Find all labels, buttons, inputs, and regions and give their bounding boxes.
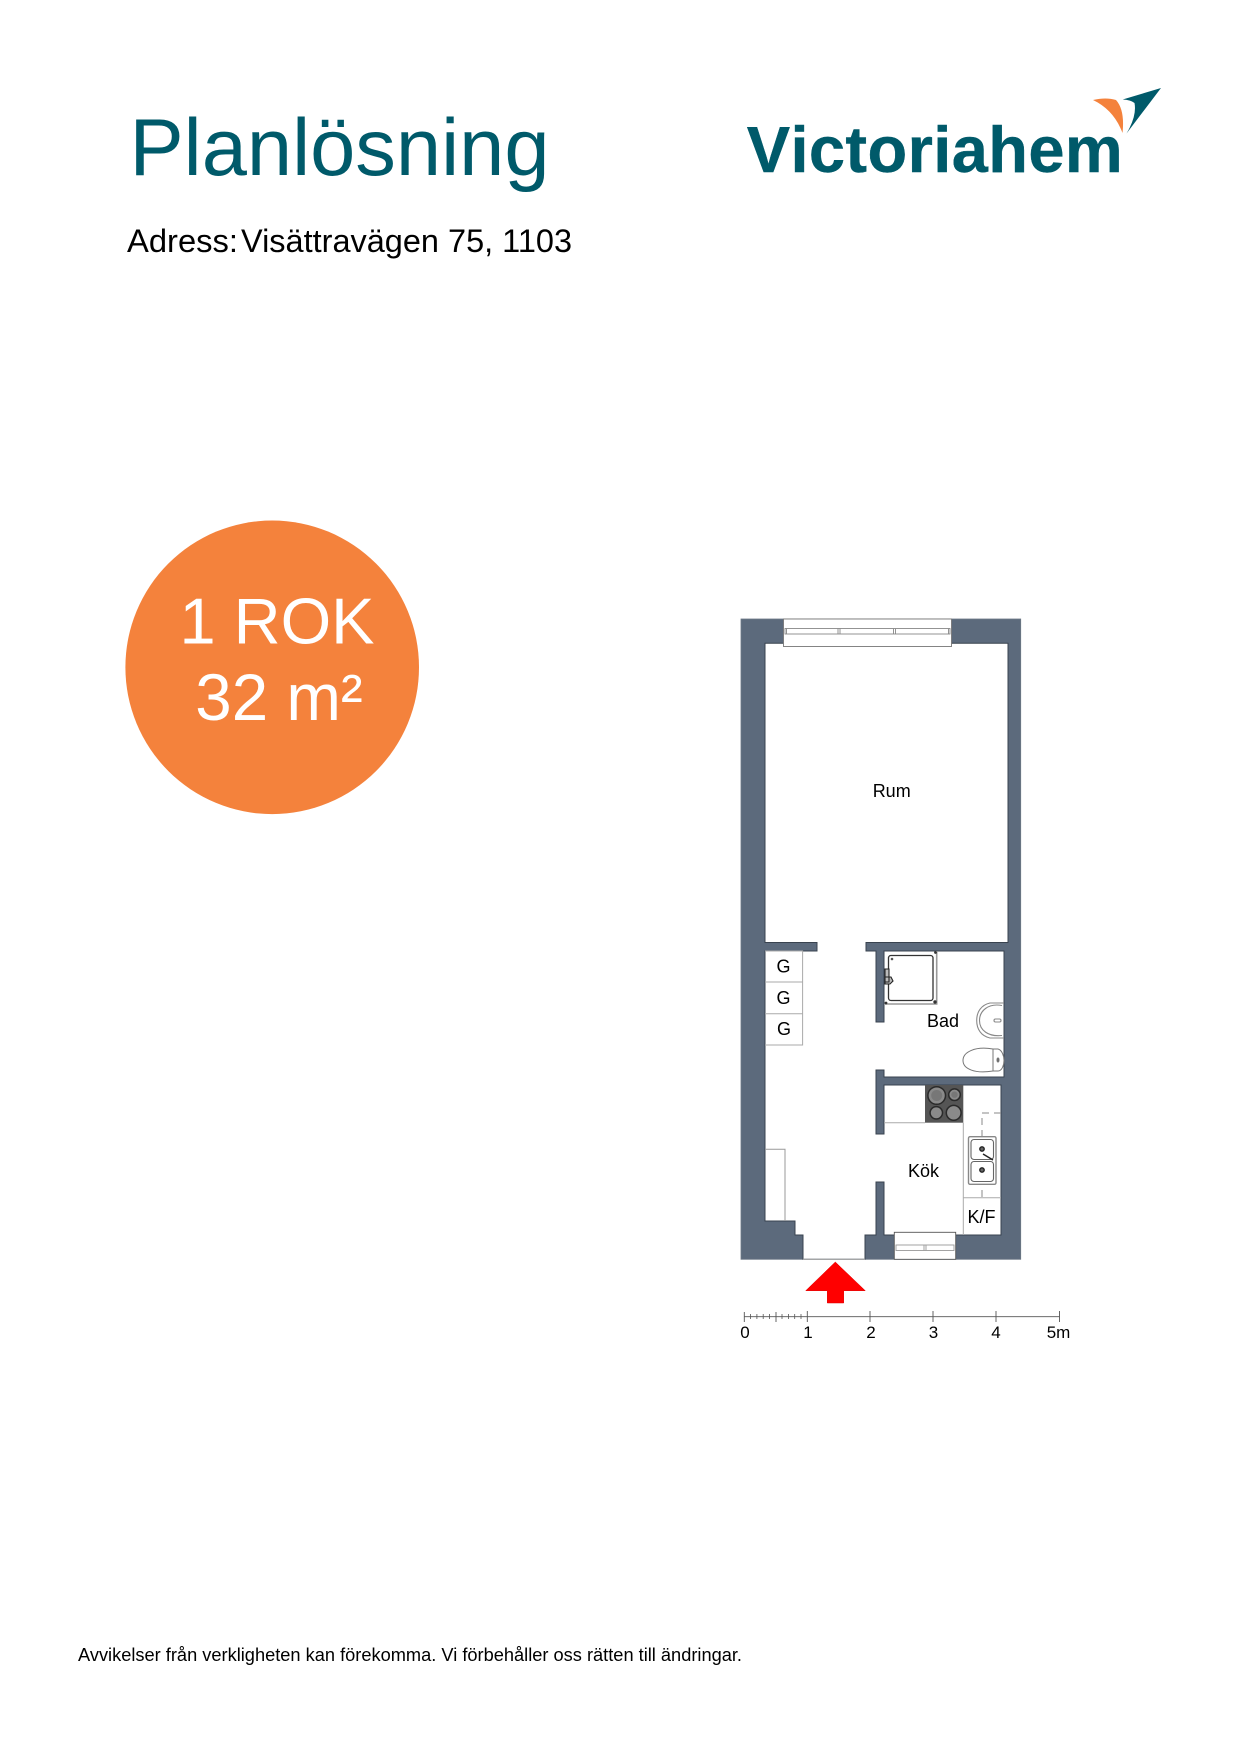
interior floor area xyxy=(765,643,1008,1259)
badge: 1 ROK 32 m²: 32 m² xyxy=(195,661,363,734)
kitchen sink xyxy=(968,1137,996,1184)
title: Planlösning xyxy=(130,103,550,193)
footer disclaimer: Avvikelser från verkligheten kan förekomma. Vi förbehåller oss rätten till ändringar. xyxy=(78,1645,742,1665)
scale bar: 5m xyxy=(1047,1323,1070,1342)
scale bar: 3 xyxy=(929,1323,938,1342)
window: room xyxy=(784,619,952,646)
scale bar: 2 xyxy=(866,1323,876,1342)
badge: 1 ROK 32 m² xyxy=(125,520,419,814)
scale bar xyxy=(740,1311,1070,1342)
room label: Kök: Kök xyxy=(908,1161,940,1181)
logo wordmark: Victoriahem xyxy=(747,113,1123,186)
shower xyxy=(885,951,937,1004)
entrance threshold xyxy=(803,1258,865,1260)
closet lower left xyxy=(765,1149,785,1221)
scale bar: 0 xyxy=(740,1323,750,1342)
window: kitchen xyxy=(894,1232,956,1259)
address: Adress: xyxy=(127,223,238,259)
scale bar: 4 xyxy=(991,1323,1001,1342)
scale bar: 1 xyxy=(803,1323,813,1342)
logo: Victoriahem xyxy=(747,88,1161,186)
floor plan xyxy=(741,619,1021,1259)
wardrobes G xyxy=(765,951,803,1045)
arrow: entrance xyxy=(806,1262,865,1303)
kitchen wall cabinet dashes xyxy=(982,1113,1001,1197)
kitchen counter xyxy=(884,1123,1001,1235)
room label: Bad: Bad xyxy=(927,1011,959,1031)
fridge label: K/F: K/F xyxy=(967,1207,996,1227)
stove xyxy=(925,1085,963,1123)
room label: Rum: Rum xyxy=(873,781,911,801)
wardrobes G: G xyxy=(776,988,791,1008)
wardrobes G: G xyxy=(776,956,791,976)
address: Visättravägen 75, 1103 xyxy=(241,223,572,259)
wardrobes G: G xyxy=(777,1019,791,1039)
toilet xyxy=(963,1048,1004,1072)
exterior walls xyxy=(741,619,1021,1259)
bathroom sink xyxy=(977,1003,1004,1038)
logo swoosh: orange xyxy=(1093,98,1123,133)
badge: 1 ROK 32 m²: 1 ROK xyxy=(179,584,375,657)
logo swoosh: teal xyxy=(1123,88,1161,134)
